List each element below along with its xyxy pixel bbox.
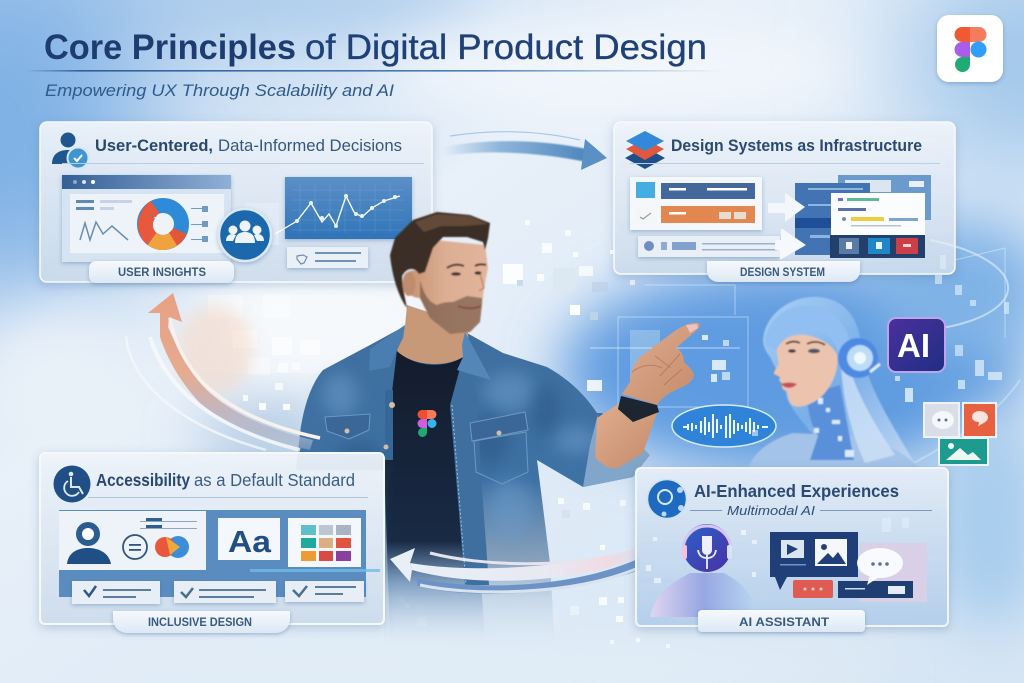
subtitle: Empowering UX Through Scalability and AI: [45, 81, 394, 100]
user profile card: [59, 511, 206, 570]
arrow head: [390, 548, 415, 582]
hair: [390, 212, 490, 308]
panel heading: User-Centered,: [95, 136, 213, 155]
icon: stacked layers: [625, 131, 665, 169]
hair front: [765, 305, 851, 358]
title rule: [25, 70, 725, 72]
jacket buttons: [344, 402, 502, 450]
panel sparkles: [646, 518, 909, 583]
icon: voice waveform: [672, 405, 776, 447]
title: Core Principles: [44, 28, 296, 67]
wristband: [618, 396, 659, 422]
panel: design systems: [614, 122, 955, 282]
icon: AI badge: [888, 318, 945, 372]
sleeve cuff: [583, 414, 650, 487]
panel heading: Design Systems as Infrastructure: [671, 136, 922, 155]
neck: [806, 385, 854, 460]
icon: wheelchair badge: [54, 466, 90, 502]
icon: gear badge: [648, 480, 686, 518]
label: AI assistant: [698, 610, 865, 632]
face: [774, 335, 837, 407]
title: of Digital Product Design: [305, 28, 707, 67]
panel heading: [95, 136, 402, 155]
arrow: bottom, to accessibility: [390, 548, 640, 594]
panel subheading: Multimodal AI: [727, 503, 815, 518]
holographic tech frame: [590, 240, 1020, 470]
arrow: top, to design systems: [442, 132, 607, 170]
face: [404, 240, 488, 334]
icon: figma logo card: [937, 15, 1003, 82]
arrow: row to screens: [775, 228, 806, 260]
component row: [638, 236, 780, 257]
dashboard window: [62, 175, 231, 262]
collars: [369, 325, 405, 371]
label: inclusive design: [113, 611, 290, 633]
panel heading: Data-Informed Decisions: [218, 136, 402, 155]
arrow: orange, back to user panel: [126, 293, 320, 450]
panel: AI-enhanced experiences: [636, 468, 948, 632]
orange glow: [177, 305, 253, 395]
woman AI assistant figure: [748, 297, 919, 469]
icon: AI badge: AI: [897, 327, 930, 364]
beard: [420, 280, 482, 334]
small note card: [287, 247, 368, 268]
panel heading: [96, 470, 355, 490]
multimedia card: [770, 532, 927, 602]
eyes and brows: [447, 264, 486, 268]
pockets: [325, 412, 528, 484]
label: inclusive design: INCLUSIVE DESIGN: [148, 617, 252, 629]
lower pale band: [420, 569, 636, 592]
arrow: components to screens: [768, 193, 805, 222]
arrow shaft: [410, 548, 640, 581]
component card: [630, 177, 762, 230]
icon: users badge: [219, 209, 271, 261]
placket: [450, 357, 489, 585]
jacket body: [296, 327, 646, 650]
type card: Aa: [228, 524, 272, 559]
label: design system: [707, 261, 860, 282]
shirt logo: [418, 410, 436, 437]
head: [390, 212, 490, 334]
label: user insights: [89, 261, 234, 283]
icon: user with check: [52, 132, 88, 168]
t-shirt: [384, 350, 485, 640]
hair back: [763, 297, 917, 469]
donut chart: [144, 206, 182, 243]
title: [44, 28, 707, 67]
forearm: [595, 404, 658, 468]
panel: user-centered decisions: [40, 122, 432, 283]
label: AI assistant: AI ASSISTANT: [739, 617, 829, 629]
blue band: [59, 510, 366, 597]
checklist cards: [72, 581, 364, 604]
headset: [838, 338, 878, 378]
panel: accessibility: [40, 453, 384, 633]
panel heading: AI-Enhanced Experiences: [694, 481, 899, 501]
colour swatch card: [288, 518, 361, 567]
denim shadows: [338, 384, 559, 469]
data particles: [208, 220, 670, 648]
upper thin band: [430, 549, 638, 564]
icons: media chips: [924, 403, 996, 465]
denim highlights: [322, 372, 597, 540]
tech squares right: [702, 255, 1009, 436]
type card: [218, 518, 280, 560]
line chart: [80, 222, 128, 240]
neck: [397, 305, 470, 364]
man pointing: [296, 212, 700, 650]
label: design system: DESIGN SYSTEM: [740, 267, 825, 279]
label: user insights: USER INSIGHTS: [118, 267, 206, 279]
panel heading: as a Default Standard: [194, 470, 355, 490]
hand: [622, 323, 700, 405]
analytics chart: [275, 177, 412, 239]
stacked screens: [795, 175, 931, 258]
ear: [402, 272, 416, 296]
panel heading: Accessibility: [96, 470, 190, 490]
shoulders: [748, 433, 919, 468]
icon: voice assistant avatar: [650, 524, 757, 617]
blue under-band: [416, 558, 640, 594]
